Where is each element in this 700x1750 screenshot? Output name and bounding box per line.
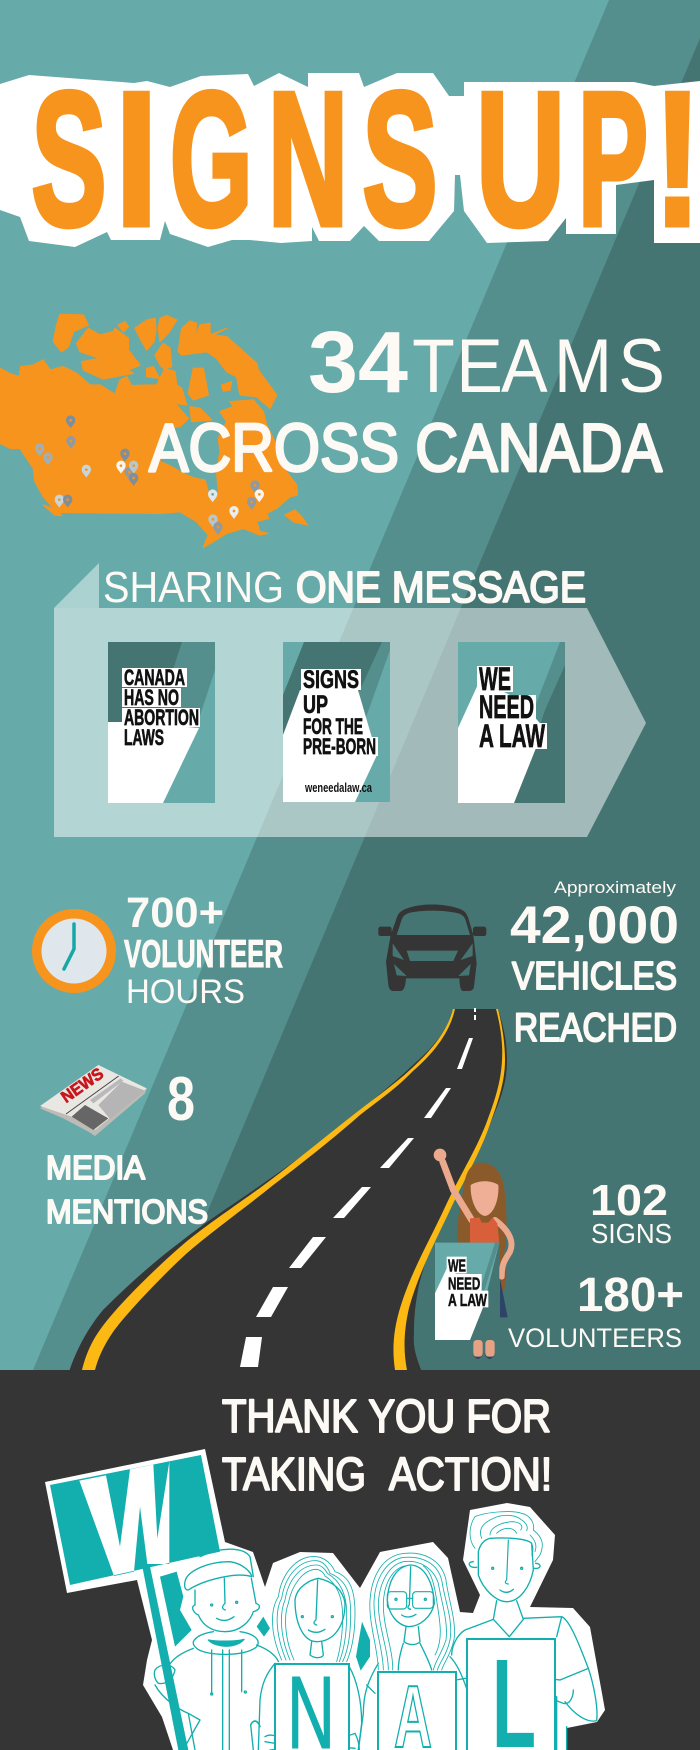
placard W <box>50 1455 370 1750</box>
person 4: boy with wavy hair <box>452 1512 597 1750</box>
mini sign: we need a law: WE <box>448 1256 466 1276</box>
sign: Canada has no abortion laws: LAWS <box>124 725 164 750</box>
icon: newspaper <box>40 1064 147 1136</box>
sign: signs up for the pre-born: FOR THE <box>303 714 363 739</box>
title: SIGNS UP!: U <box>476 54 565 266</box>
heading: thank you for taking action: THANK YOU FOR <box>222 1390 551 1442</box>
road <box>69 1008 507 1372</box>
stat: approximately 42,000 vehicles reached: VEHICLES <box>512 955 677 998</box>
title: SIGNS UP!: I <box>116 54 158 266</box>
stat: 8 media mentions: MEDIA <box>46 1149 145 1186</box>
sign: Canada has no abortion laws <box>108 642 215 803</box>
people holding WE NEED A LAW letters <box>45 1449 605 1750</box>
person 3: girl with glasses <box>358 1553 477 1750</box>
heading: sharing one message <box>103 564 586 612</box>
stat: 700+ volunteer hours: 700+ <box>126 889 224 937</box>
stat: 102 signs, 180+ volunteers: VOLUNTEERS <box>508 1323 682 1353</box>
stat: 700+ volunteer hours: HOURS <box>126 973 245 1011</box>
heading: 34 teams across Canada: TEAMS <box>412 324 665 409</box>
icon: newspaper: NEWS <box>57 1064 107 1107</box>
stat: 102 signs, 180+ volunteers <box>508 1176 684 1353</box>
mini sign: we need a law: NEED <box>448 1273 480 1293</box>
stat: 700+ volunteer hours <box>124 889 283 1011</box>
sign: Canada has no abortion laws: CANADA <box>124 665 185 690</box>
stat: 8 media mentions: 8 <box>167 1065 195 1134</box>
person 2: long-haired girl with N <box>251 1557 362 1750</box>
road edge line: left <box>82 1009 455 1370</box>
icon: car <box>378 904 486 991</box>
heading: thank you for taking action: ACTION! <box>389 1448 552 1500</box>
stat: 102 signs, 180+ volunteers: 180+ <box>577 1269 684 1322</box>
sign: we need a law: WE <box>479 661 511 697</box>
stat: 102 signs, 180+ volunteers: SIGNS <box>591 1218 672 1249</box>
sign: Canada has no abortion laws: HAS NO <box>124 685 179 710</box>
stat: 8 media mentions <box>46 1065 208 1230</box>
woman holding sign <box>434 1149 511 1359</box>
heading: 34 teams across Canada <box>149 314 665 486</box>
stat: 102 signs, 180+ volunteers: 102 <box>590 1176 668 1225</box>
sign: signs up for the pre-born: weneedalaw.ca <box>304 781 373 795</box>
heading: 34 teams across Canada: 34 <box>308 314 408 411</box>
road centre dashes <box>240 1008 476 1367</box>
sign: signs up for the pre-born: SIGNS <box>303 666 359 694</box>
person 1: boy in cap and hoodie <box>154 1549 278 1750</box>
mini sign: we need a law: A LAW <box>448 1290 487 1310</box>
title: SIGNS UP! <box>0 54 700 266</box>
mini sign: we need a law <box>435 1243 499 1340</box>
map of Canada with team pins <box>0 314 307 547</box>
heading: thank you for taking action <box>222 1390 552 1500</box>
sign: signs up for the pre-born: UP <box>303 691 328 719</box>
heading: sharing one message: SHARING <box>103 564 284 612</box>
title: SIGNS UP!: G <box>170 54 252 266</box>
title: SIGNS UP!: N <box>268 54 348 266</box>
heading: sharing one message: ONE MESSAGE <box>296 564 586 612</box>
road edge line: right <box>393 1009 505 1370</box>
placard L <box>467 1633 555 1750</box>
sign: we need a law: A LAW <box>479 718 546 754</box>
stat: 8 media mentions: MENTIONS <box>46 1193 208 1230</box>
icon: clock <box>32 909 116 993</box>
footer panel <box>0 1370 700 1750</box>
sign: we need a law: NEED <box>479 689 534 725</box>
stat: approximately 42,000 vehicles reached <box>510 878 679 1050</box>
pins <box>35 415 264 535</box>
sign: we need a law <box>458 642 565 803</box>
title: SIGNS UP!: S <box>32 54 106 266</box>
heading: thank you for taking action: TAKING <box>222 1448 366 1500</box>
sign: signs up for the pre-born: PRE-BORN <box>303 734 376 759</box>
arrow panel: sharing one message <box>54 563 646 837</box>
sign: signs up for the pre-born <box>283 642 390 802</box>
stat: approximately 42,000 vehicles reached: Approximately <box>554 878 677 897</box>
stat: 700+ volunteer hours: VOLUNTEER <box>124 933 283 976</box>
stat: approximately 42,000 vehicles reached: 42,000 <box>510 896 679 955</box>
title: SIGNS UP!: S <box>362 54 438 266</box>
sign: Canada has no abortion laws: ABORTION <box>124 705 199 730</box>
